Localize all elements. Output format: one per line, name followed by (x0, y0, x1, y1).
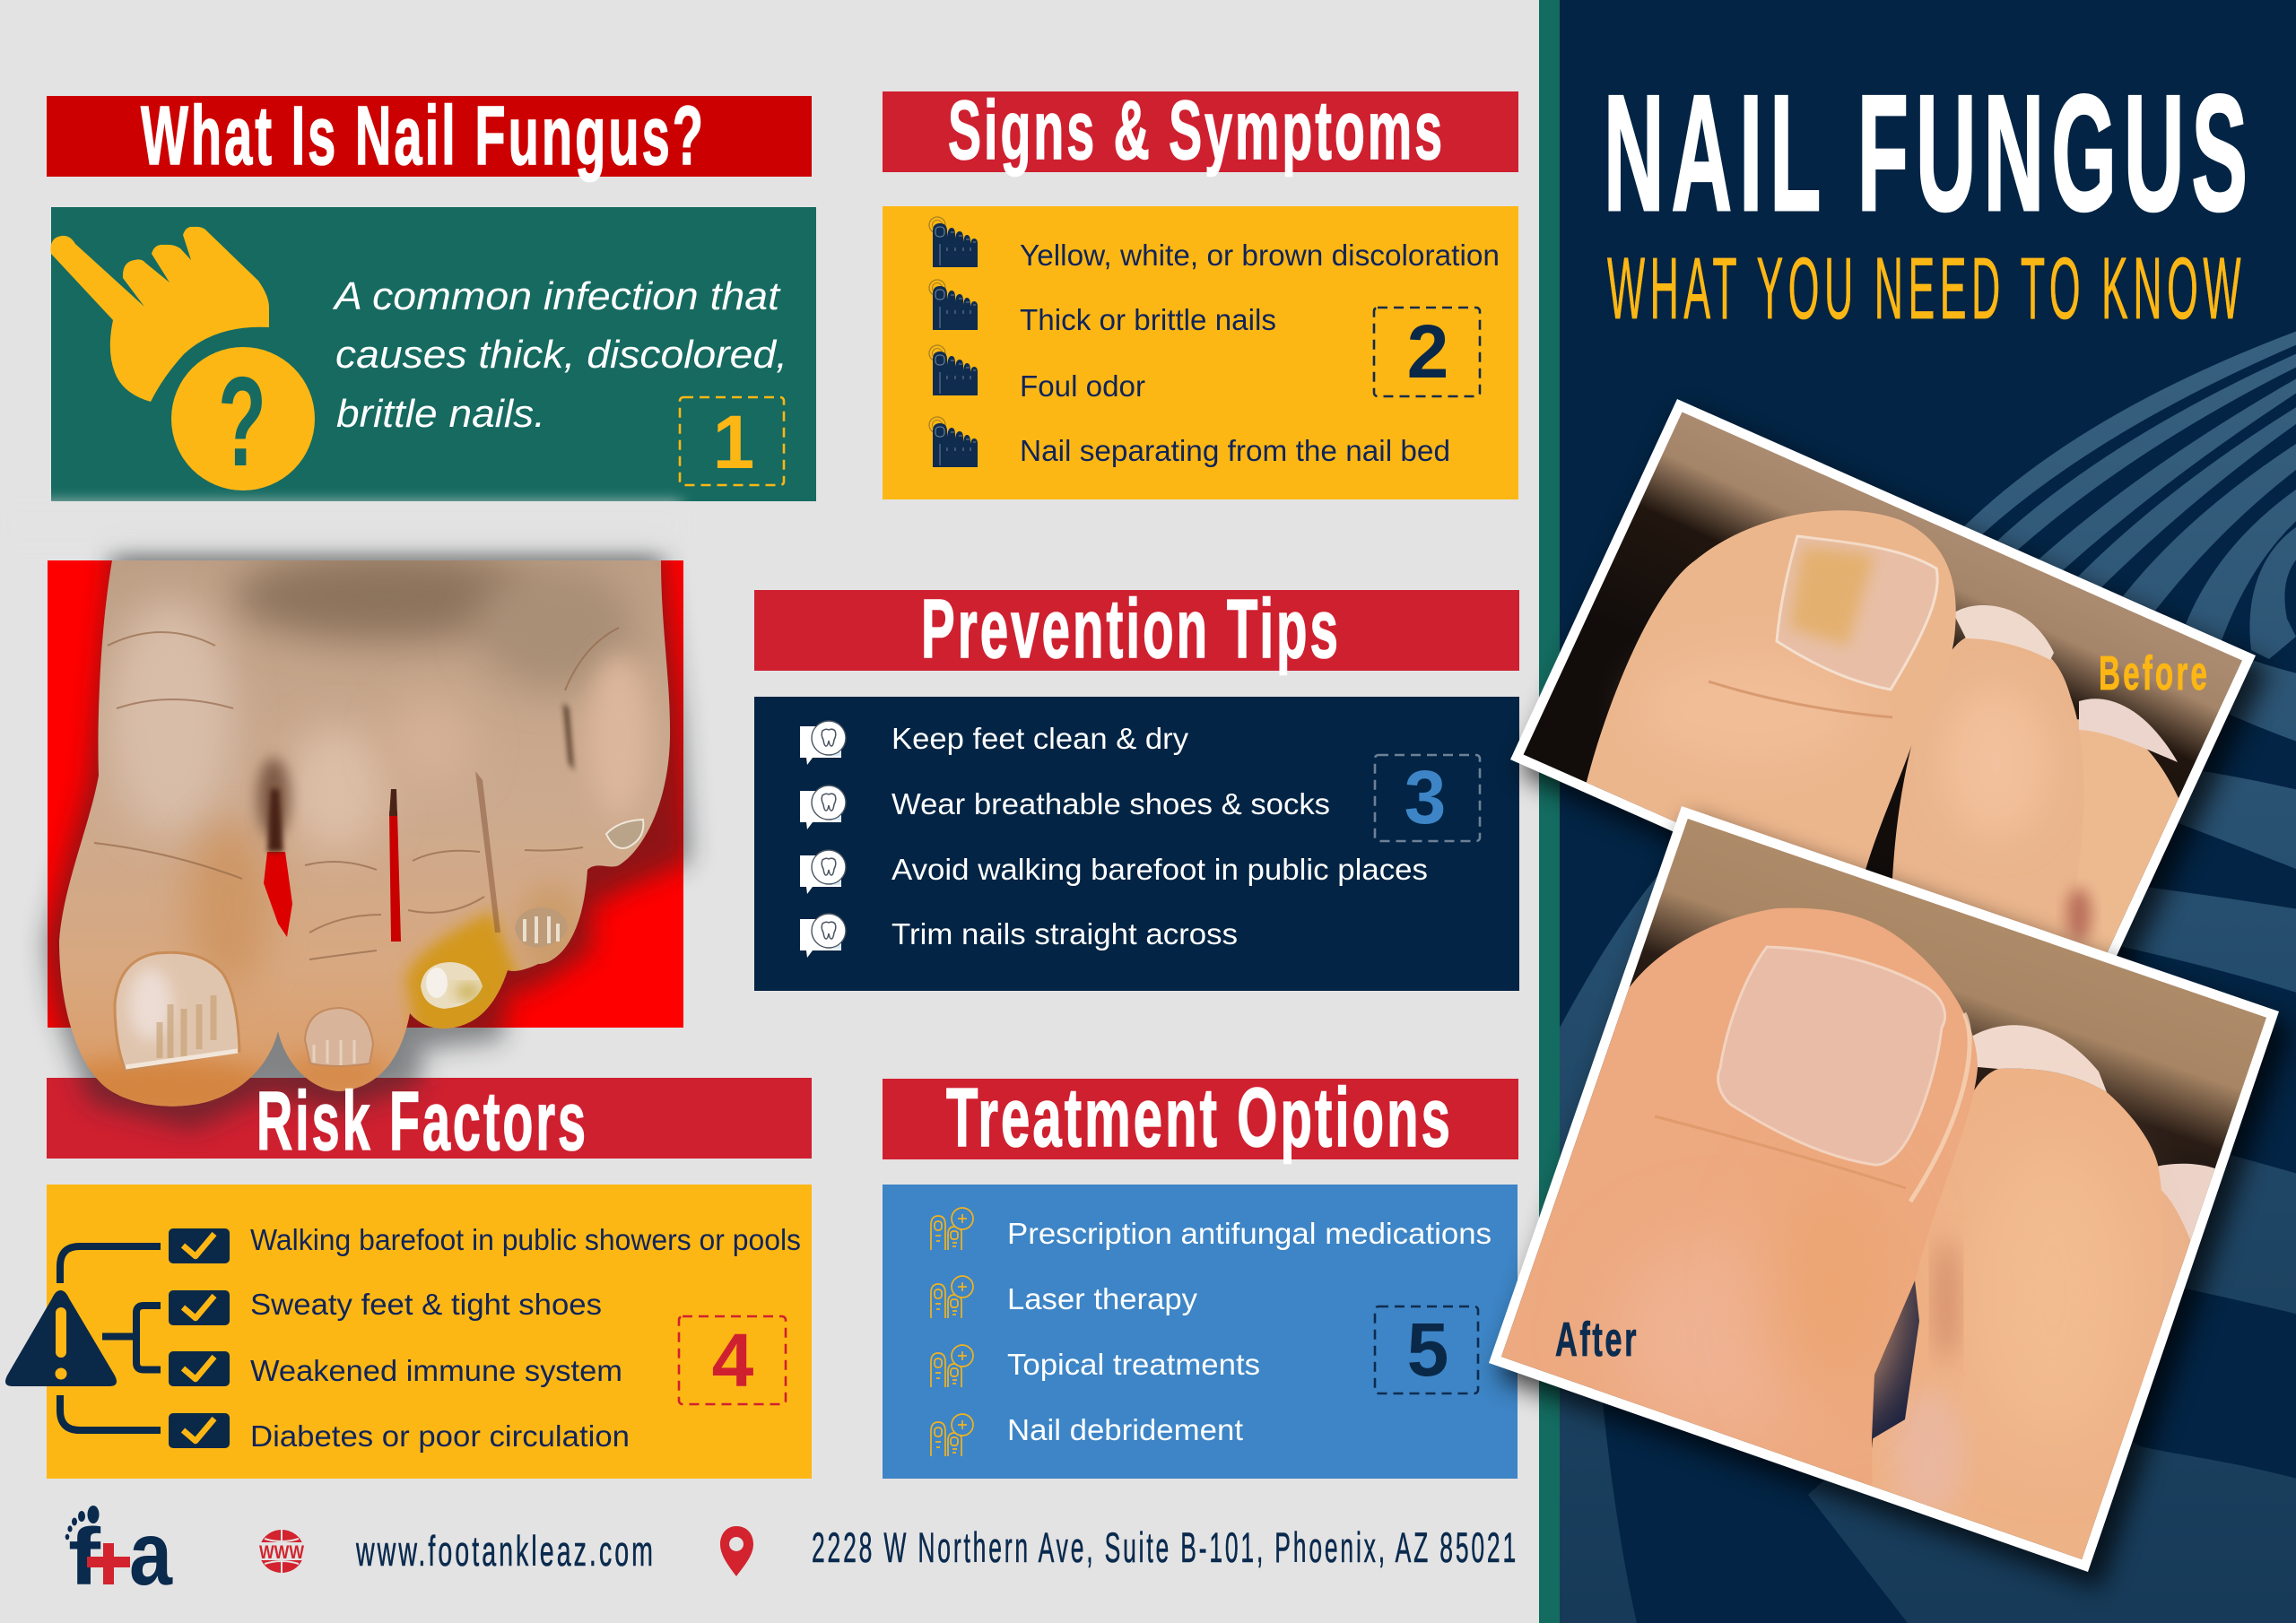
street address: 2228 W Northern Ave, Suite B-101, Phoenix, AZ 85021 (812, 1523, 1518, 1571)
text: definition: brittle nails. (336, 392, 545, 436)
icon: check 1 (169, 1228, 230, 1263)
icon: toes 1 (929, 217, 978, 267)
nail: second toe (305, 1008, 373, 1066)
footer logo (65, 1504, 173, 1604)
number badge 5 (1375, 1306, 1478, 1393)
nail: little toe (606, 820, 643, 848)
third toe (2135, 1164, 2215, 1401)
footer logo: f (68, 1513, 101, 1602)
symptom 4: Nail separating from the nail bed (1020, 435, 1450, 468)
footer logo: a (129, 1504, 173, 1604)
right panel background (1539, 0, 2296, 1623)
risk 3: Weakened immune system (250, 1355, 622, 1388)
icon: www globe (257, 1530, 306, 1573)
icon: toes 2 (929, 280, 978, 330)
icon: finger plus 3 (931, 1345, 973, 1387)
risk 2: Sweaty feet & tight shoes (250, 1289, 602, 1322)
nail: big toe (115, 952, 239, 1071)
number badge 1 (680, 397, 784, 485)
tip 1: Keep feet clean & dry (891, 723, 1188, 756)
treatment 3: Topical treatments (1007, 1349, 1260, 1382)
tip 4: Trim nails straight across (891, 918, 1238, 951)
second toe (1892, 605, 2100, 945)
risk 1: Walking barefoot in public showers or pools (250, 1224, 801, 1257)
connector lines (60, 1246, 161, 1430)
icon: www globe: WWW (259, 1542, 304, 1563)
tip 2: Wear breathable shoes & socks (891, 788, 1330, 821)
treatment 2: Laser therapy (1007, 1283, 1197, 1316)
risk 4: Diabetes or poor circulation (250, 1420, 630, 1454)
icon: toes 4 (929, 417, 978, 467)
tip 3: Avoid walking barefoot in public places (891, 854, 1428, 887)
heading bar: Risk Factors (47, 1078, 812, 1159)
number badge 2 (1374, 308, 1480, 396)
text: definition: causes thick, discolored, (335, 333, 787, 377)
symptom 2: Thick or brittle nails (1020, 304, 1276, 337)
photo: foot with nail fungus on red (0, 502, 691, 1130)
big toe (1586, 510, 1956, 870)
third toe (2066, 699, 2179, 952)
photo: after (1489, 806, 2292, 1589)
number badge 4 (679, 1316, 786, 1404)
icon: finger plus 2 (931, 1276, 973, 1318)
panel: treatment options (883, 1185, 1518, 1479)
heading text: Risk Factors: Risk Factors (257, 1074, 588, 1167)
icon: finger plus 1 (931, 1208, 973, 1250)
heading: What Is Nail Fungus (47, 89, 812, 182)
text: definition (332, 274, 787, 436)
treatment 4: Nail debridement (1007, 1414, 1244, 1447)
icon: location pin (720, 1526, 753, 1576)
icon: tooth bubble 3 (800, 850, 846, 894)
dark gap between toes (1872, 1280, 1919, 1439)
treatment 1: Prescription antifungal medications (1007, 1218, 1492, 1251)
icon: question mark circle: ? (218, 351, 266, 493)
big toe (1501, 907, 1978, 1487)
heading: What Is Nail Fungus: What Is Nail Fungus? (141, 89, 706, 182)
number badge 5: 5 (1407, 1307, 1448, 1392)
number badge 3 (1375, 755, 1480, 841)
photo: before (1510, 399, 2278, 965)
heading: Signs and Symptoms: Signs & Symptoms (948, 83, 1445, 177)
panel: risk factors (5, 1185, 812, 1479)
number badge 2: 2 (1407, 309, 1448, 394)
heading: Prevention Tips: Prevention Tips (921, 582, 1341, 675)
heading: Treatment Options: Treatment Options (946, 1071, 1453, 1164)
icon: question mark circle (171, 347, 315, 493)
number badge 4: 4 (712, 1318, 754, 1402)
nail with yellow streak (1777, 536, 1937, 690)
page background (0, 0, 1539, 1623)
healthy nail (1718, 947, 1945, 1165)
icon: toes 3 (929, 345, 978, 395)
icon: tooth bubble 2 (800, 785, 846, 829)
panel: signs and symptoms (883, 206, 1518, 499)
website address: www.footankleaz.com (355, 1527, 656, 1575)
number badge 1: 1 (713, 400, 754, 484)
toe creases (94, 628, 619, 959)
text: definition: A common infection that (332, 274, 781, 318)
icon: warning triangle (5, 1290, 117, 1386)
after label: After (1555, 1313, 1639, 1367)
icon: check 3 (169, 1351, 230, 1386)
heading: Signs and Symptoms (883, 83, 1518, 177)
icon: check 2 (169, 1290, 230, 1325)
gaps between toes (264, 703, 574, 942)
nail: fourth toe (515, 907, 568, 948)
symptom 1: Yellow, white, or brown discoloration (1020, 239, 1500, 273)
icon: tooth bubble 1 (800, 721, 846, 765)
panel: prevention tips (754, 697, 1519, 991)
icon: tooth bubble 4 (800, 914, 846, 958)
icon: pointing hand (50, 227, 269, 402)
nail: third toe (421, 962, 483, 1009)
panel: what is nail fungus (50, 207, 816, 501)
second toe (1870, 1025, 2163, 1578)
icon: check 4 (169, 1413, 230, 1448)
foot body (59, 560, 671, 1107)
symptom 3: Foul odor (1020, 370, 1145, 404)
icon: finger plus 4 (931, 1414, 973, 1456)
heading: Prevention Tips (754, 582, 1519, 675)
before label: Before (2099, 647, 2210, 700)
heading: Treatment Options (883, 1071, 1518, 1164)
number badge 3: 3 (1405, 755, 1446, 839)
